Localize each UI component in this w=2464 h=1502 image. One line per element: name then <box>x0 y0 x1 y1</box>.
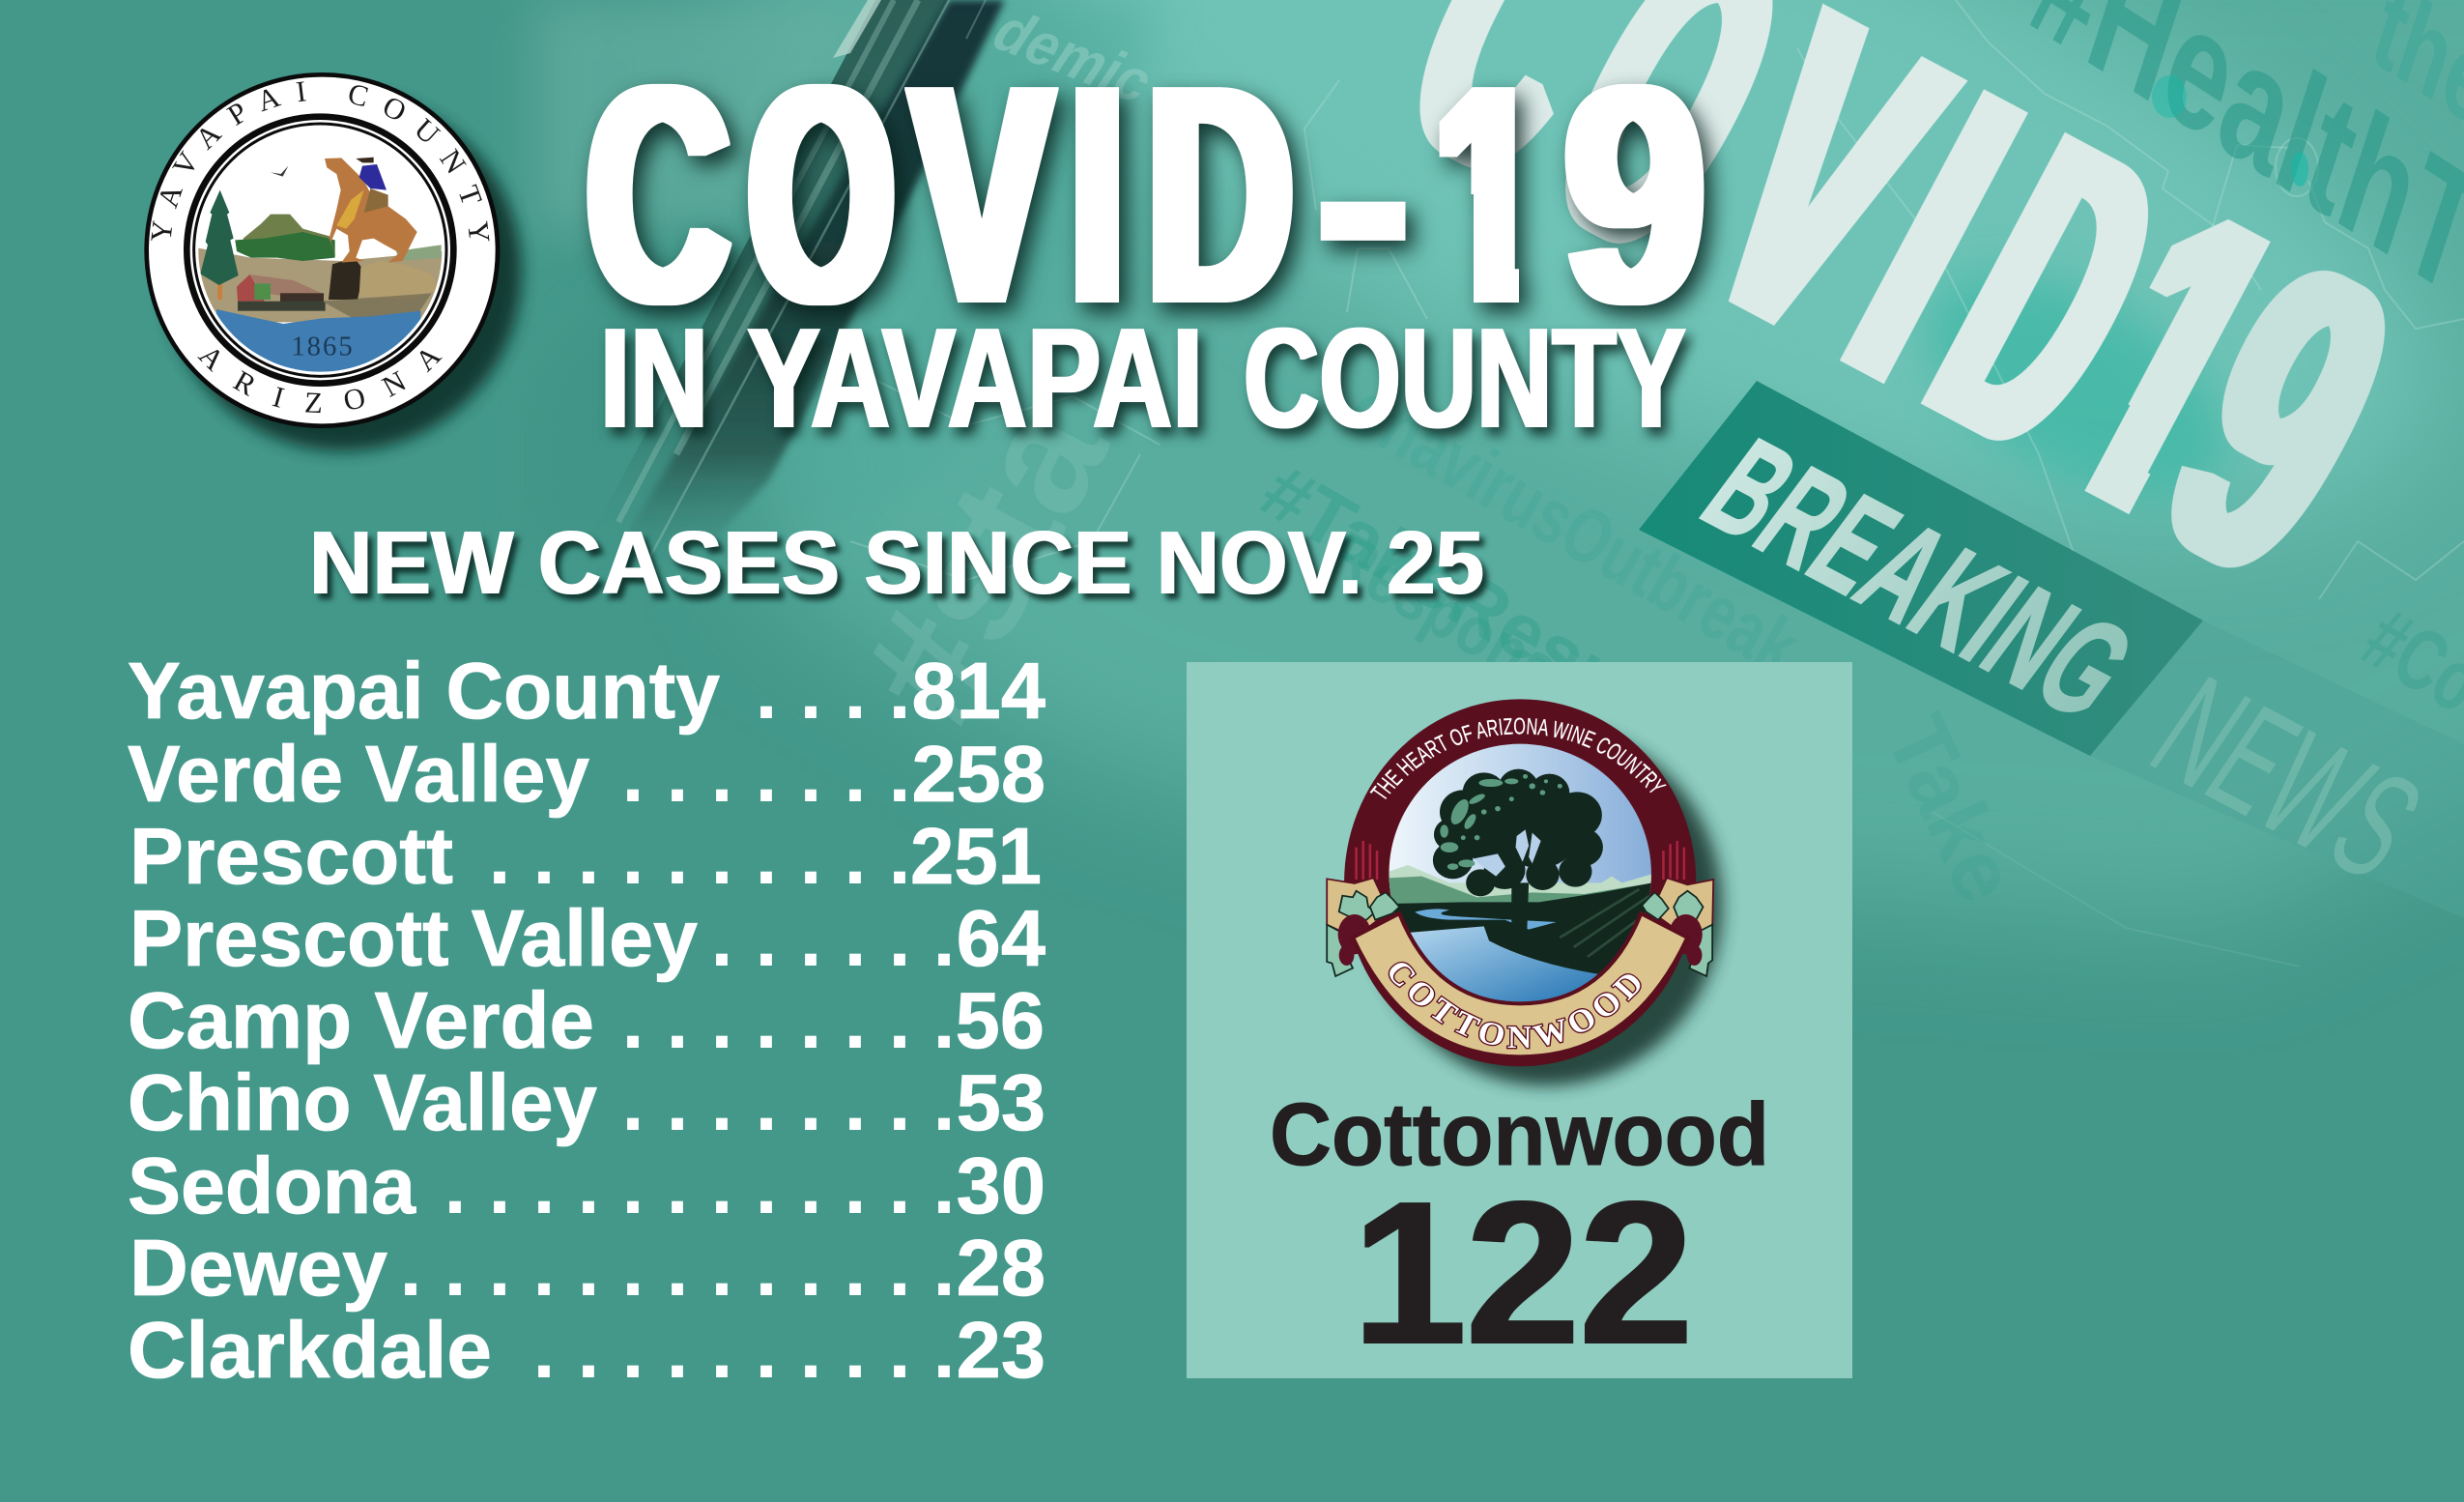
row: Prescott: 251 <box>910 811 1042 901</box>
row: Yavapai County: 814 <box>912 646 1046 736</box>
arch text: THE HEART OF ARIZONA WINE COUNTRY <box>1370 717 1667 799</box>
row: Clarkdale: Clarkdale <box>128 1305 492 1395</box>
row: Chino Valley: ........ <box>621 1057 956 1147</box>
title: COVID-19 <box>580 77 1728 331</box>
subtitle: in Yavapai County: YAVAPAI <box>747 299 1203 458</box>
title: COVID-19: O <box>749 21 894 368</box>
row: Dewey <box>129 1223 1046 1313</box>
seal ring text: YAVAPAI COUNTY <box>151 81 489 242</box>
row: Dewey: ............. <box>399 1223 956 1313</box>
row: Clarkdale: .......... <box>532 1305 956 1395</box>
logo: Cottonwood seal <box>1326 699 1735 1098</box>
seal scene <box>198 157 443 372</box>
row: Verde Valley: ....... <box>621 729 911 819</box>
bird <box>271 166 288 177</box>
row: Clarkdale: 23 <box>957 1305 1046 1395</box>
seal ring text <box>151 81 489 414</box>
list of new cases <box>128 646 1046 1395</box>
big background COVID19 word: D <box>1874 45 2225 548</box>
row: Prescott: Prescott <box>129 811 453 901</box>
row: Yavapai County <box>128 646 1046 736</box>
big background COVID19 word <box>1419 0 2385 568</box>
phone edge dark stripes <box>588 0 1005 580</box>
title: COVID-19: C <box>587 20 729 367</box>
grape leaves and clusters <box>1327 891 1712 976</box>
row: Chino Valley: Chino Valley <box>128 1057 597 1147</box>
subtitle: in Yavapai County <box>600 299 1686 458</box>
hill <box>244 215 331 251</box>
oak tree <box>1433 769 1603 936</box>
ribbon tails <box>1327 878 1713 938</box>
subtitle: in Yavapai County: COUNTY <box>1244 299 1686 458</box>
background hashtags: Responsibility <box>1316 517 1706 787</box>
Cottonwood banner <box>1353 913 1687 1056</box>
forest <box>235 232 335 261</box>
row: Prescott Valley: 64 <box>957 893 1046 983</box>
background <box>526 0 2464 968</box>
horse and rider <box>325 158 417 263</box>
background hashtags: #sta <box>826 373 1143 751</box>
row: Verde Valley <box>128 729 1046 819</box>
landscape <box>1388 741 1653 1008</box>
row: Sedona <box>128 1141 1046 1230</box>
Cottonwood label: Cottonwood <box>1270 1085 1769 1184</box>
background hashtags: onavirusOutbreak <box>1335 365 1814 691</box>
ground <box>198 248 443 322</box>
row: Prescott Valley <box>129 893 1046 983</box>
title: COVID-19: - <box>1319 22 1408 368</box>
big background COVID19 word: 1 <box>2001 115 2342 612</box>
row: Dewey: Dewey <box>129 1223 387 1313</box>
big background COVID19 word: I <box>1791 1 2077 470</box>
breaking band <box>1639 381 2203 756</box>
row: Yavapai County: .... <box>755 646 911 736</box>
heading: new cases since Nov. 25: NEW CASES SINCE NOV. 25 <box>309 512 1484 613</box>
title: COVID-19: I <box>1073 20 1123 367</box>
barn <box>237 274 326 311</box>
row: Verde Valley: 258 <box>912 729 1046 819</box>
seal ring text: ARIZONA <box>197 350 443 414</box>
big background COVID19 word: 9 <box>2105 167 2458 672</box>
row: Camp Verde <box>128 975 1045 1065</box>
subtitle: in Yavapai County: IN <box>600 299 708 458</box>
row: Chino Valley <box>128 1057 1046 1147</box>
background hashtags: Take <box>1867 702 2035 916</box>
logo: Yavapai County seal <box>144 72 533 462</box>
row: Sedona: 30 <box>957 1141 1046 1230</box>
row: Chino Valley: 53 <box>957 1057 1046 1147</box>
row: Prescott <box>129 811 1042 901</box>
row: Dewey: 28 <box>957 1223 1046 1313</box>
row: Yavapai County: Yavapai County <box>128 646 720 736</box>
row: Sedona: ............ <box>444 1141 956 1230</box>
title: COVID-19: 9 <box>1565 21 1705 367</box>
news band <box>2090 621 2464 918</box>
rocks <box>322 258 438 319</box>
county map lines <box>850 0 2464 967</box>
pine tree <box>200 190 239 300</box>
title: COVID-19: 1 <box>1435 20 1542 368</box>
row: Prescott Valley: Prescott Valley <box>129 893 698 983</box>
year: 1865 <box>291 331 353 361</box>
row: Clarkdale <box>128 1305 1046 1395</box>
background hashtags: demic <box>980 0 1167 115</box>
title: COVID-19: D <box>1148 21 1293 368</box>
panel: Cottonwood <box>1187 662 1852 1387</box>
background hashtags: #TakeResp <box>1248 448 1643 725</box>
row: Verde Valley: Verde Valley <box>128 729 589 819</box>
row: Camp Verde: ........ <box>621 975 956 1065</box>
row: Prescott: .......... <box>488 811 911 901</box>
water <box>216 309 420 380</box>
Cottonwood number: 122 <box>1353 1158 1693 1387</box>
maroon arch <box>1344 699 1696 1066</box>
seal ring <box>147 74 498 426</box>
row: Camp Verde: Camp Verde <box>128 975 594 1065</box>
title: COVID-19: V <box>912 22 1052 368</box>
banner text: COTTONWOOD <box>1388 961 1642 1050</box>
row: Prescott Valley: ...... <box>710 893 956 983</box>
BREAKING text: BREAKING <box>1676 412 2161 747</box>
background hashtags <box>826 0 2464 916</box>
row: Camp Verde: 56 <box>956 975 1045 1065</box>
row: Sedona: Sedona <box>128 1141 416 1230</box>
